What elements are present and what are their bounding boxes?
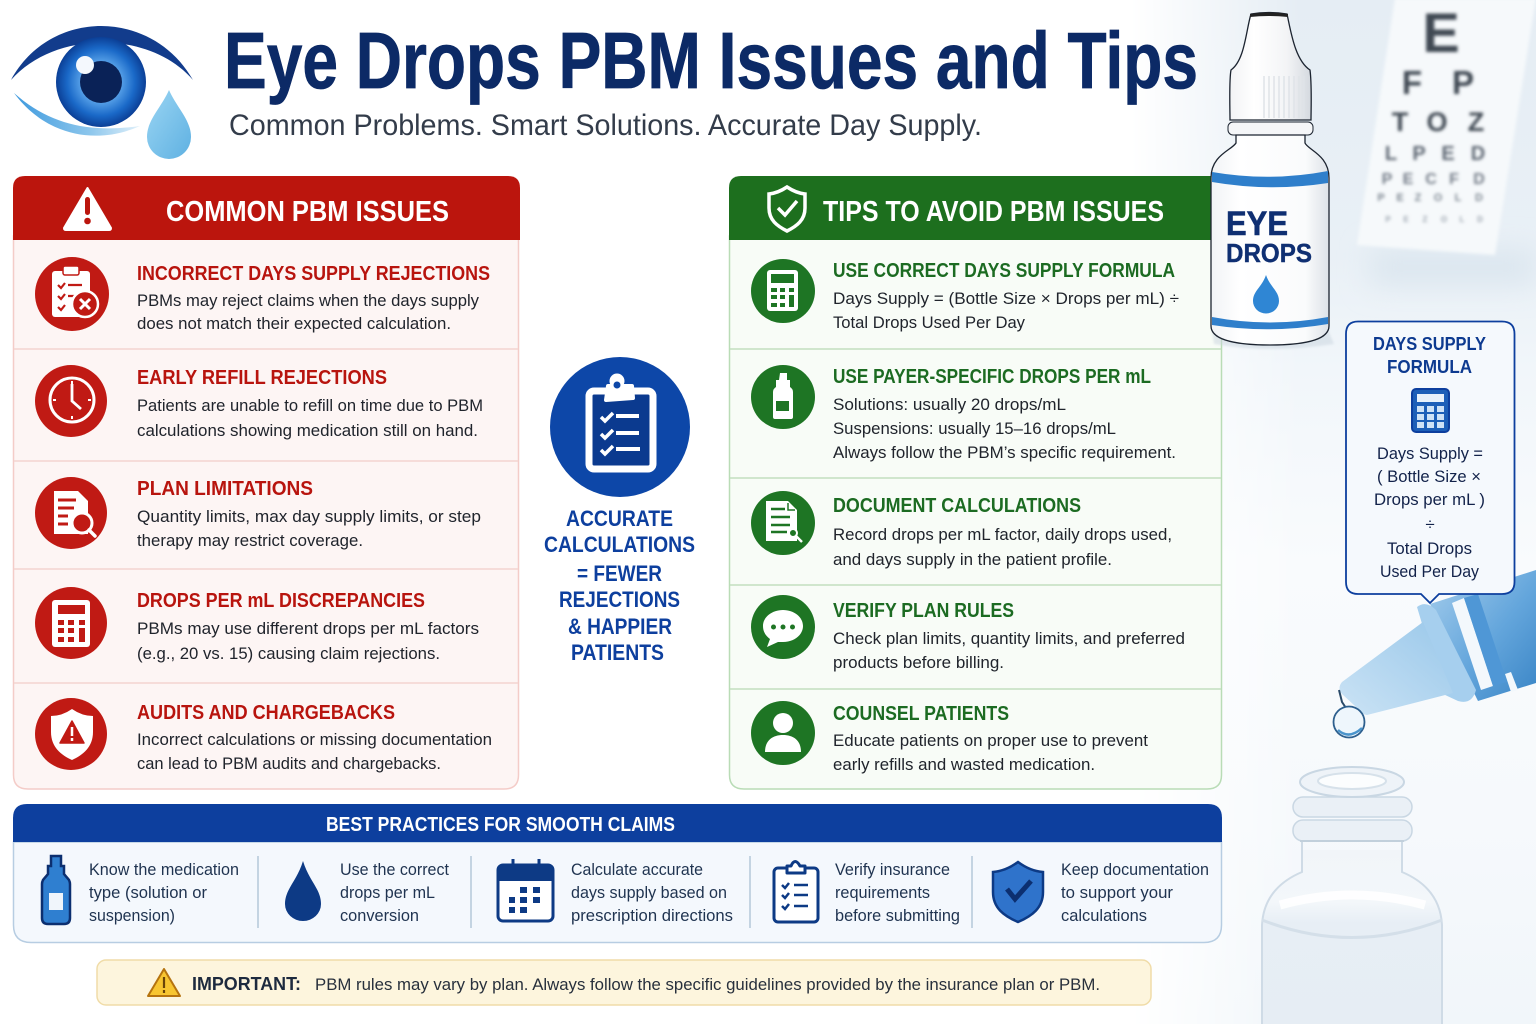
panel: common PBM issues [13,176,520,789]
eye chart: P [1377,192,1385,204]
tip: counsel patients: COUNSEL PATIENTS [833,703,1009,725]
callout: days supply formula: FORMULA [1387,357,1472,377]
callout: accurate calculations: & HAPPIER [568,614,672,639]
issue: audits and chargebacks: Incorrect calculations or missing documentation [137,730,492,749]
callout: days supply formula: Total Drops [1387,539,1472,558]
eye chart: L [1455,192,1462,204]
eye chart: P [1382,171,1393,188]
practice: calculate accurate days supply: Calculate accurate [571,860,703,879]
icon: calculator [1412,389,1449,432]
eye chart: T [1392,107,1409,137]
eye chart: P [1452,64,1474,101]
callout: days supply formula: DAYS SUPPLY [1373,334,1486,354]
eye chart: D [1473,171,1485,188]
tip: counsel patients: Educate patients on proper use to prevent [833,731,1148,750]
tip: verify plan rules: Check plan limits, quantity limits, and preferred [833,629,1185,648]
issue: drops per mL discrepancies: PBMs may use different drops per mL factors [137,619,479,638]
tip: use payer-specific drops per mL: Always follow the PBM’s specific requirement. [833,443,1176,462]
callout: accurate calculations: PATIENTS [571,640,664,665]
header: tips to avoid PBM issues: TIPS TO AVOID PBM ISSUES [823,196,1164,228]
subtitle: Common Problems. Smart Solutions. Accurate Day Supply. [229,109,982,142]
eye chart: F [1449,171,1459,188]
tip: use correct days supply formula: USE CORRECT DAYS SUPPLY FORMULA [833,260,1175,282]
eye chart: Z [1415,192,1422,204]
eye chart: D [1471,143,1485,165]
practice: use the correct drops per mL: Use the correct [340,860,449,879]
issue: incorrect days supply rejections: does not match their expected calculation. [137,314,451,333]
issue: early refill rejections: EARLY REFILL REJECTIONS [137,367,387,389]
eye chart: P [1412,143,1426,165]
background [1186,0,1536,1024]
icon: eye drops bottle: DROPS [1226,238,1312,268]
issue: early refill rejections [35,365,483,440]
header: tips to avoid PBM issues [729,176,1222,240]
header: common PBM issues: COMMON PBM ISSUES [166,196,449,228]
callout: days supply formula: Days Supply = [1377,444,1483,463]
eye chart: Z [1468,107,1484,137]
issue: drops per mL discrepancies: DROPS PER mL DISCREPANCIES [137,590,425,612]
practice: keep documentation: calculations [1061,906,1147,925]
tip: verify plan rules: products before billing. [833,653,1004,672]
practice: verify insurance requirements: requirements [835,883,930,902]
callout: accurate calculations: = FEWER [577,561,662,586]
callout: days supply formula: Drops per mL ) [1374,490,1485,509]
eye chart: E [1403,215,1409,224]
tip: use correct days supply formula: Total Drops Used Per Day [833,313,1025,332]
issue: drops per mL discrepancies: (e.g., 20 vs. 15) causing claim rejections. [137,644,440,663]
panel: best practices [13,804,1222,942]
tip: use payer-specific drops per mL: USE PAYER-SPECIFIC DROPS PER mL [833,366,1151,388]
practice: know the medication type: type (solution or [89,883,207,902]
panel: tips to avoid PBM issues [729,176,1222,789]
eye chart: E [1396,192,1404,204]
eye chart: Z [1423,215,1428,224]
tip: counsel patients [751,701,1148,774]
issue: drops per mL discrepancies [35,587,479,663]
practice: verify insurance requirements [774,860,960,925]
tip: use correct days supply formula: Days Supply = (Bottle Size × Drops per mL) ÷ [833,289,1179,308]
eye chart: L [1460,215,1465,224]
eye chart [1357,0,1536,255]
eye chart: O [1426,107,1448,137]
eye chart: E [1403,171,1414,188]
illustration: glass bottle [1262,767,1442,1024]
practice: know the medication type: suspension) [89,906,175,925]
tip: document calculations: and days supply in the patient profile. [833,550,1112,569]
practice: use the correct drops per mL [285,860,449,925]
icon: warning triangle [148,969,180,996]
issue: incorrect days supply rejections: PBMs may reject claims when the days supply [137,291,479,310]
issue: audits and chargebacks: can lead to PBM audits and chargebacks. [137,754,441,773]
panel: best practices: BEST PRACTICES FOR SMOOTH CLAIMS [326,814,675,836]
issue: incorrect days supply rejections [35,257,490,333]
callout: days supply formula: ( Bottle Size × [1377,467,1481,486]
callout: important note [97,960,1151,1005]
tip: use correct days supply formula [751,259,1179,332]
callout: days supply formula: ÷ [1425,515,1435,534]
issue: early refill rejections: calculations showing medication still on hand. [137,421,478,440]
practice: calculate accurate days supply [498,859,733,925]
tip: document calculations: DOCUMENT CALCULATIONS [833,495,1081,517]
eye chart: D [1477,215,1483,224]
callout: accurate calculations: CALCULATIONS [544,532,695,557]
eye chart: E [1422,1,1460,64]
practice: use the correct drops per mL: conversion [340,906,419,925]
tip: use payer-specific drops per mL: Suspensions: usually 15–16 drops/mL [833,419,1116,438]
callout: days supply formula: Used Per Day [1380,562,1479,581]
practice: keep documentation: to support your [1061,883,1173,902]
eye chart: L [1385,143,1397,165]
tip: verify plan rules [751,595,1185,672]
eye chart: P [1385,215,1391,224]
issue: audits and chargebacks [35,698,492,773]
issue: incorrect days supply rejections: INCORRECT DAYS SUPPLY REJECTIONS [137,263,490,285]
practice: keep documentation [993,860,1209,925]
eye chart: E [1441,143,1455,165]
eye chart: C [1425,171,1437,188]
illustration: dropper with drop [1334,570,1536,738]
tip: counsel patients: early refills and wasted medication. [833,755,1095,774]
practice: know the medication type: Know the medication [89,860,239,879]
callout: days supply formula [1346,322,1514,603]
practice: calculate accurate days supply: prescription directions [571,906,733,925]
eye chart: F [1402,64,1422,101]
tip: verify plan rules: VERIFY PLAN RULES [833,600,1014,622]
tip: document calculations [751,491,1172,569]
tip: document calculations: Record drops per mL factor, daily drops used, [833,525,1172,544]
practice: verify insurance requirements: Verify insurance [835,860,950,879]
callout: important note: IMPORTANT: [192,974,301,994]
issue: plan limitations [35,477,481,550]
callout: accurate calculations: REJECTIONS [559,587,680,612]
practice: keep documentation: Keep documentation [1061,860,1209,879]
icon: eye drops bottle [1211,12,1334,349]
tip: use payer-specific drops per mL: Solutions: usually 20 drops/mL [833,395,1066,414]
issue: plan limitations: Quantity limits, max day supply limits, or step [137,507,481,526]
practice: calculate accurate days supply: days supply based on [571,883,727,902]
callout: important note: PBM rules may vary by plan. Always follow the specific guidelines provided by the insurance plan or PBM. [315,975,1100,994]
callout: accurate calculations: ACCURATE [566,506,673,531]
tip: use payer-specific drops per mL [751,365,1176,462]
issue: plan limitations: PLAN LIMITATIONS [137,478,313,500]
eye chart: O [1441,215,1447,224]
practice: verify insurance requirements: before submitting [835,906,960,925]
icon: eye drops bottle: EYE [1226,205,1288,243]
callout: accurate calculations [544,357,695,665]
header: common PBM issues [13,176,520,240]
practice: use the correct drops per mL: drops per mL [340,883,435,902]
issue: audits and chargebacks: AUDITS AND CHARGEBACKS [137,702,395,724]
eye chart: O [1434,192,1443,204]
practice: know the medication type [42,856,239,925]
eye chart: D [1475,192,1483,204]
icon: eye with tear drop [11,26,193,159]
title: Eye Drops PBM Issues and Tips [224,16,1198,105]
issue: early refill rejections: Patients are unable to refill on time due to PBM [137,396,483,415]
icon: clipboard checklist [550,357,690,497]
issue: plan limitations: therapy may restrict coverage. [137,531,363,550]
